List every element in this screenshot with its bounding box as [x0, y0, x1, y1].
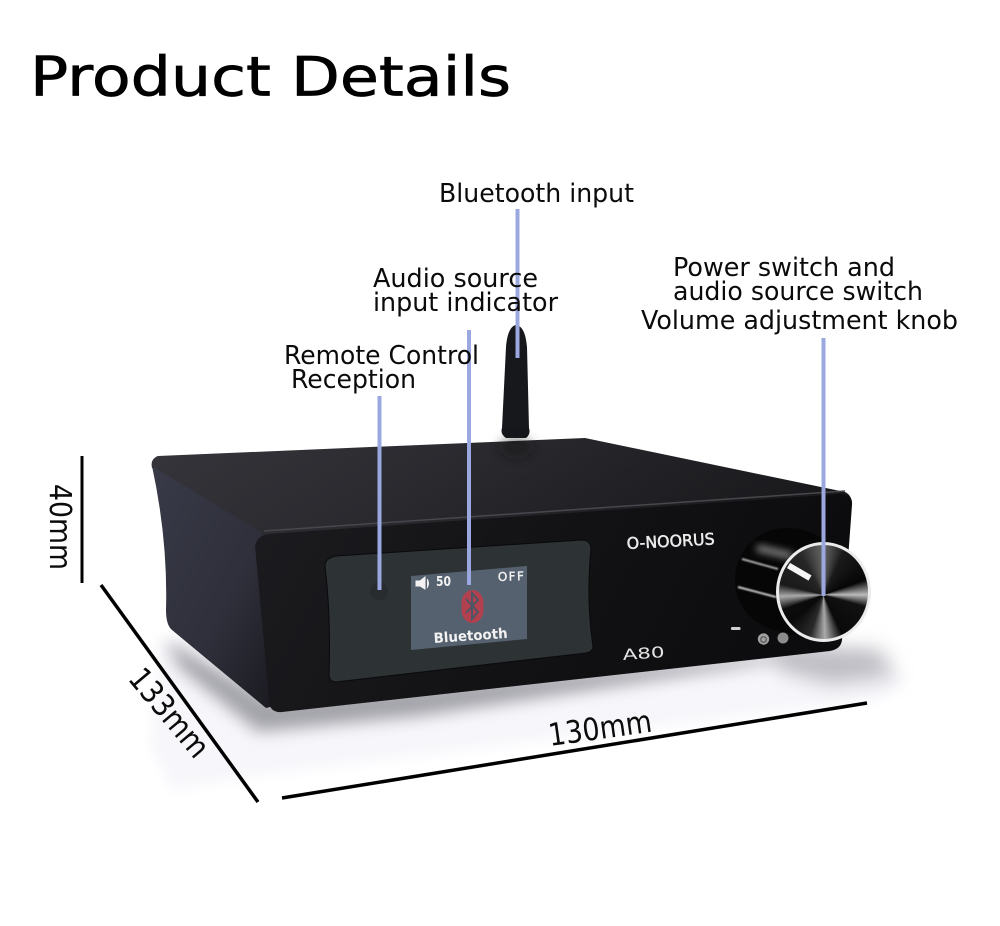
- amplifier device: [152, 325, 852, 712]
- source button: [778, 632, 788, 644]
- leader line: remote control reception: [378, 396, 382, 590]
- dimension: height: 40mm: [42, 484, 77, 570]
- label: power and volume knob: Power switch and: [673, 253, 895, 283]
- bluetooth badge: [462, 590, 484, 623]
- dimension: depth: [101, 585, 258, 802]
- volume knob body: [735, 528, 835, 642]
- dimension: height: [42, 456, 82, 583]
- leader line: audio source indicator: [467, 330, 471, 585]
- power button: [758, 633, 769, 645]
- title: Product Details: [30, 46, 511, 108]
- antenna base shadow: [500, 439, 532, 455]
- front face: [255, 494, 852, 712]
- label: remote control reception: Reception: [291, 365, 416, 395]
- label: remote control reception: [284, 341, 479, 395]
- model label: A80: [622, 643, 665, 664]
- dimension: depth: 133mm: [121, 661, 217, 765]
- label: power and volume knob: Volume adjustment knob: [641, 306, 958, 336]
- knob pointer: [788, 566, 810, 578]
- dimension: width: 130mm: [546, 704, 654, 754]
- label: audio source input indicator: Audio source: [373, 264, 538, 294]
- label: remote control reception: Remote Control: [284, 341, 479, 371]
- left side: [152, 466, 274, 708]
- screen: [411, 566, 527, 650]
- label: power and volume knob: [641, 253, 958, 336]
- remote control receiver: [370, 582, 388, 600]
- volume knob face: [776, 542, 871, 642]
- front top edge highlight: [264, 491, 845, 531]
- screen OFF text: OFF: [498, 569, 524, 584]
- screen bluetooth label: Bluetooth: [433, 626, 508, 647]
- top surface: [152, 438, 852, 545]
- antenna: [502, 325, 530, 438]
- faint ground reflection: [150, 640, 908, 790]
- label: bluetooth input: Bluetooth input: [439, 179, 634, 209]
- leader line: bluetooth input: [516, 209, 520, 358]
- ground shadow: [166, 640, 895, 732]
- label: power and volume knob: audio source switch: [673, 277, 923, 307]
- speaker icon: [416, 577, 428, 589]
- brand logo: O-NOORUS: [626, 529, 715, 553]
- label: audio source input indicator: input indicator: [373, 288, 558, 318]
- screen volume value: 50: [436, 575, 451, 590]
- display panel: [325, 540, 593, 682]
- indicator dash: [731, 627, 740, 630]
- label: audio source input indicator: [373, 264, 558, 318]
- dimension: width: [282, 703, 867, 798]
- leader line: volume knob: [822, 338, 826, 596]
